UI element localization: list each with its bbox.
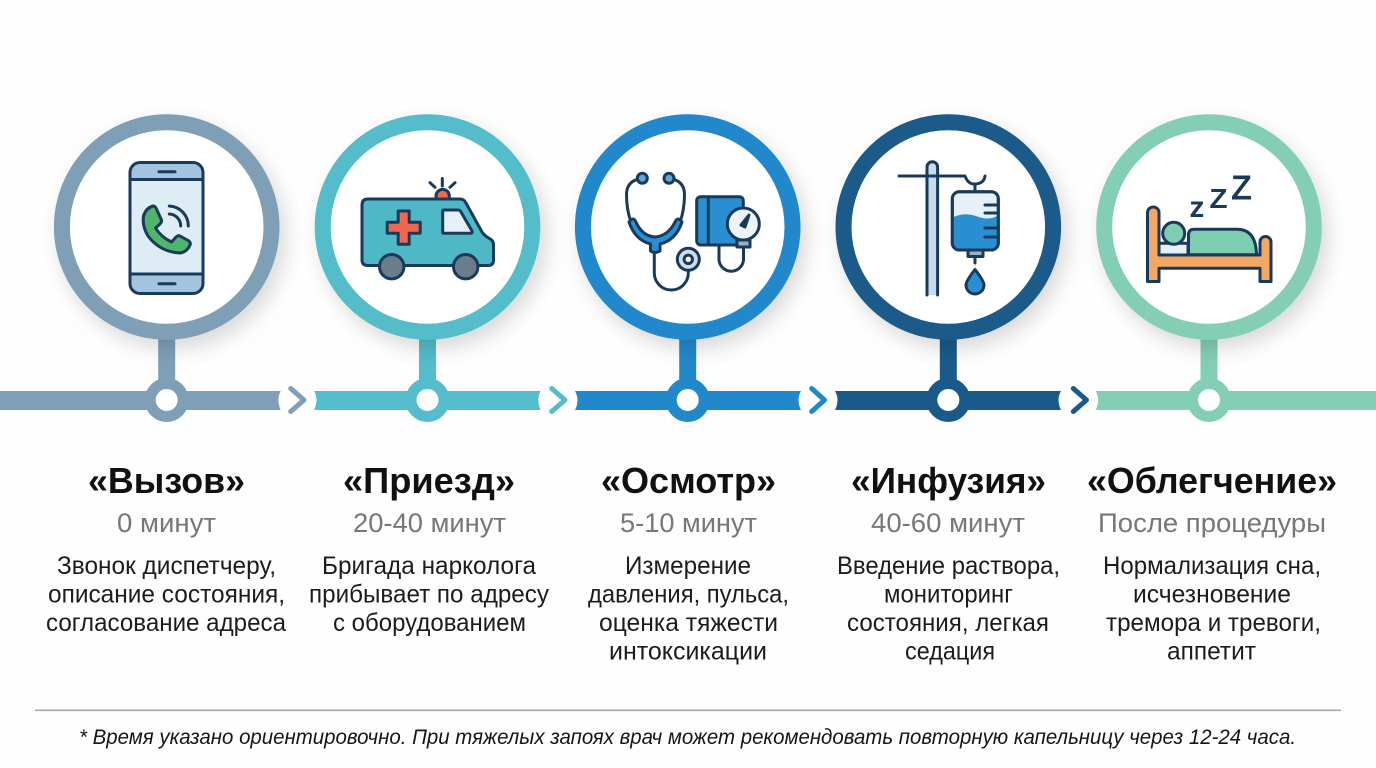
chevron 2 [552, 388, 565, 412]
description 2 [309, 552, 549, 637]
ring 2 [323, 122, 532, 332]
heading 2: «Приезд» [343, 460, 515, 501]
description 3 [588, 552, 789, 666]
timeline segment 1 [0, 391, 281, 410]
ring 3 [583, 122, 792, 332]
description 1: описание состояния, [48, 580, 285, 608]
description 1 [46, 552, 286, 637]
timeline segment 4 [835, 391, 1061, 410]
footnote: * Время указано ориентировочно. При тяжелых запоях врач может рекомендовать повторную капельницу через 12-24 часа. [79, 726, 1296, 749]
icon: sleeping person [1148, 169, 1271, 282]
connector stem 1 [158, 330, 175, 392]
duration 4: 40-60 минут [871, 508, 1025, 538]
icon: stethoscope and tonometer [626, 173, 759, 290]
heading 3: «Осмотр» [601, 460, 776, 501]
connector stem 4 [940, 330, 957, 392]
step 1: call [0, 122, 304, 637]
step 5: relief [1087, 122, 1376, 665]
ring 1 [62, 122, 272, 332]
chevron 3 [812, 388, 824, 412]
description 2: с оборудованием [333, 609, 526, 637]
duration 2: 20-40 минут [353, 508, 506, 538]
heading 4: «Инфузия» [851, 460, 1046, 501]
description 5 [1103, 552, 1321, 666]
step 4: infusion [835, 122, 1086, 665]
description 3: давления, пульса, [588, 580, 789, 608]
icon: ambulance [362, 178, 494, 279]
connector stem 2 [419, 330, 436, 392]
heading 5: «Облегчение» [1087, 460, 1337, 501]
description 2: прибывает по адресу [309, 580, 549, 608]
connector stem 3 [679, 330, 696, 392]
icon: sleeping person: z [1190, 192, 1204, 223]
ring 5 [1104, 122, 1314, 332]
step 2: arrival [309, 122, 565, 637]
description 4: Введение раствора, [837, 552, 1060, 580]
ring 4 [844, 122, 1053, 332]
duration 1: 0 минут [117, 508, 216, 538]
duration 5: После процедуры [1098, 508, 1326, 538]
timeline node 3 [671, 384, 704, 416]
description 4: мониторинг [884, 580, 1013, 608]
connector stem 5 [1200, 330, 1218, 392]
timeline node 1 [150, 384, 183, 416]
icon: smartphone with call [130, 162, 203, 294]
description 3: оценка тяжести [599, 609, 778, 637]
description 4 [837, 552, 1060, 666]
description 1: согласование адреса [46, 609, 286, 637]
description 4: седация [905, 638, 995, 666]
chevron 1 [291, 388, 304, 412]
description 3: интоксикации [609, 638, 767, 666]
timeline node 2 [411, 384, 444, 416]
description 3: Измерение [625, 552, 751, 580]
duration 3: 5-10 минут [620, 508, 757, 538]
description 5: Нормализация сна, [1103, 552, 1321, 580]
icon: IV drip [899, 162, 998, 295]
icon: sleeping person: Z [1210, 183, 1227, 213]
timeline node 4 [932, 384, 965, 416]
description 1: Звонок диспетчеру, [57, 552, 276, 580]
description 4: состояния, легкая [847, 609, 1049, 637]
step 3: examination [575, 122, 824, 665]
timeline segment 5 [1096, 391, 1376, 410]
chevron 4 [1073, 388, 1086, 412]
heading 1: «Вызов» [88, 460, 245, 501]
timeline segment 2 [314, 391, 541, 410]
timeline segment 3 [575, 391, 801, 410]
description 5: исчезновение [1133, 580, 1291, 608]
description 5: аппетит [1167, 638, 1257, 666]
icon: sleeping person: Z [1232, 169, 1252, 206]
description 2: Бригада нарколога [322, 552, 536, 580]
timeline node 5 [1192, 384, 1226, 416]
description 5: тремора и тревоги, [1106, 609, 1321, 637]
